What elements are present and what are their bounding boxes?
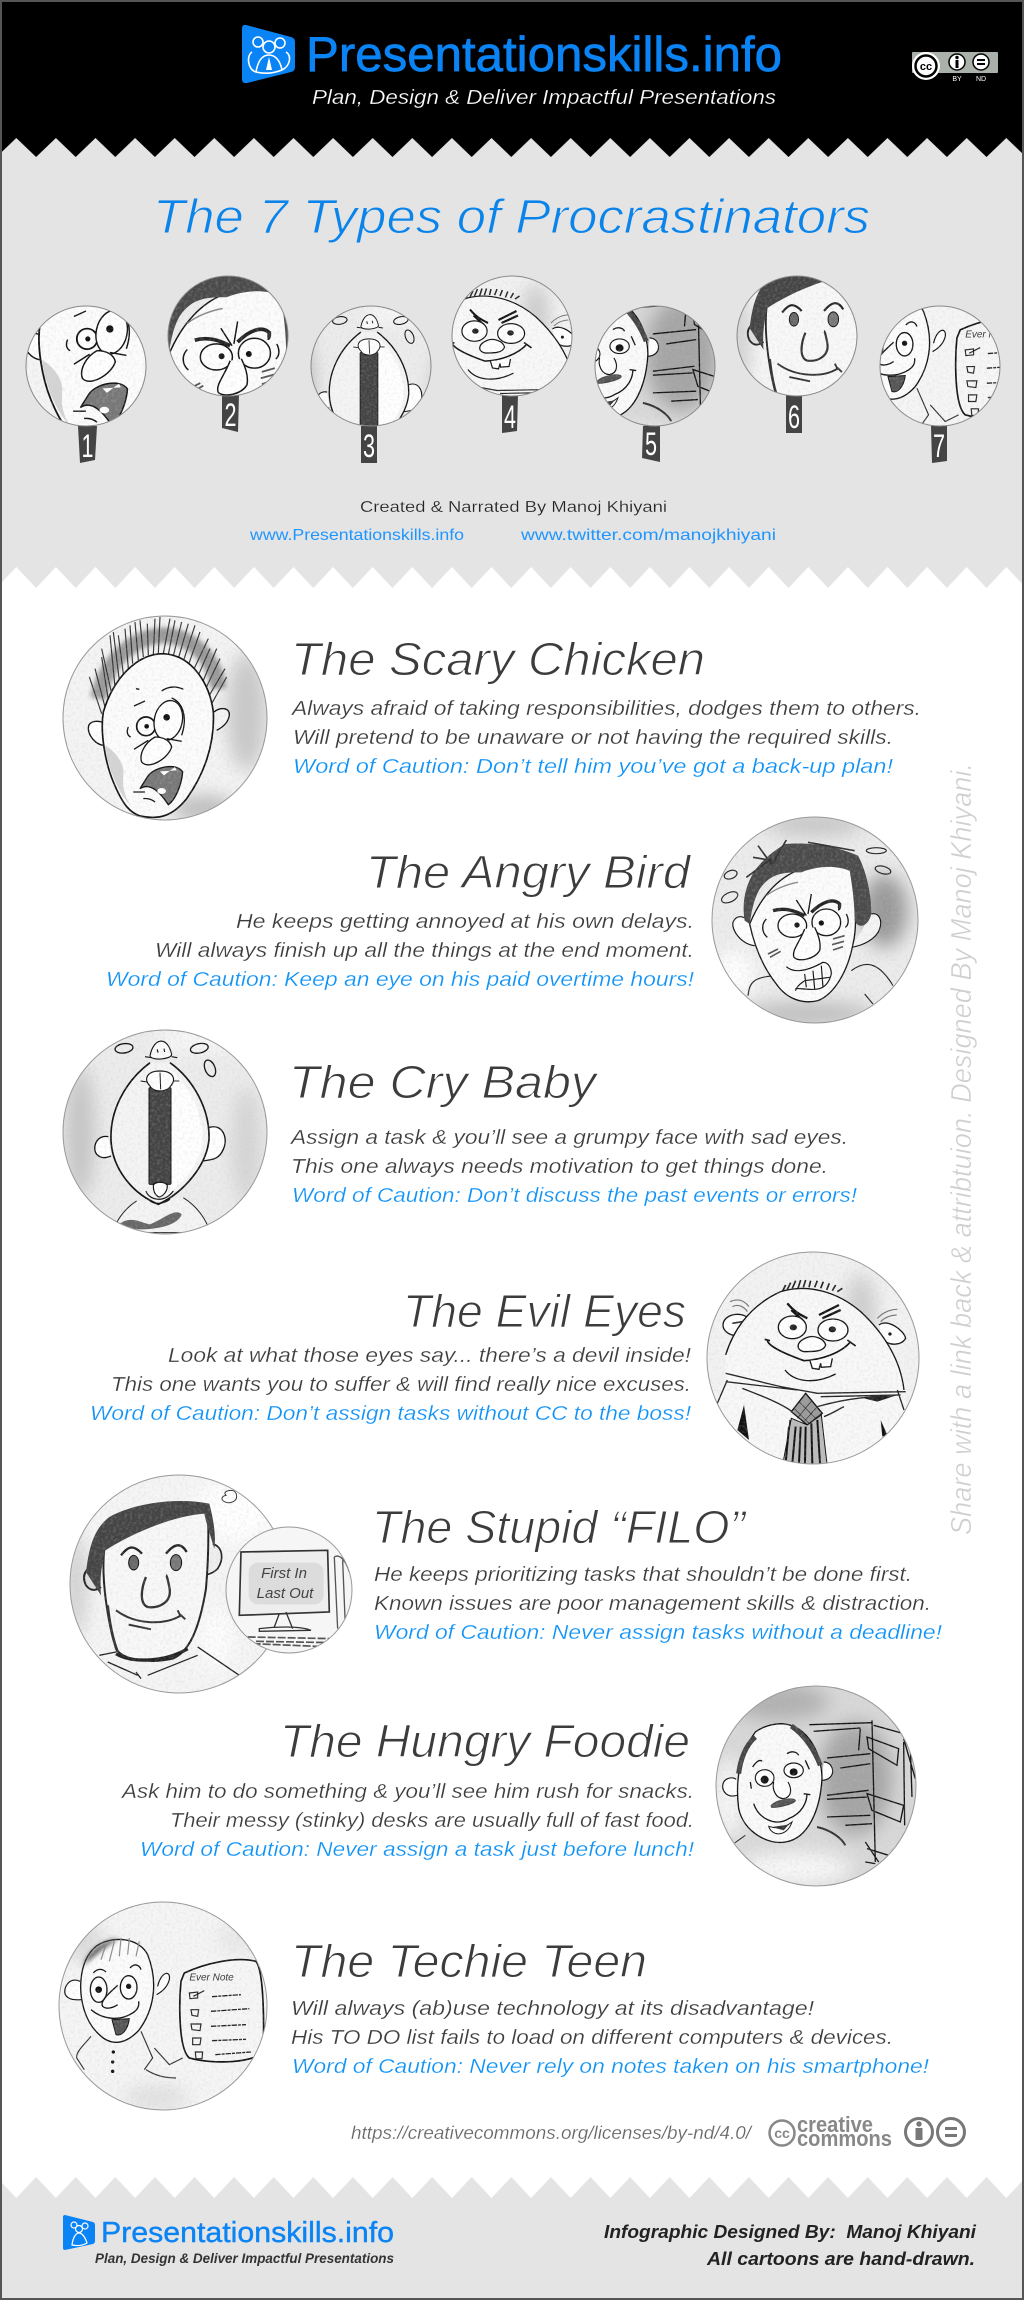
icon: evil eyes portrait bbox=[706, 1252, 920, 1464]
heading: The Angry Bird bbox=[366, 846, 691, 898]
icon: small portrait 2 with number tag bbox=[168, 276, 288, 432]
footer tagline: Plan, Design & Deliver Impactful Presentations bbox=[95, 2251, 394, 2266]
icon: cc by-nd badge: BY bbox=[952, 76, 962, 83]
description: Known issues are poor management skills & distraction. bbox=[374, 1593, 931, 1615]
title: The 7 Types of Procrastinators bbox=[153, 191, 870, 244]
icon: small portrait 1 with number tag bbox=[26, 306, 146, 463]
description: He keeps getting annoyed at his own delays. bbox=[236, 911, 694, 933]
description: He keeps prioritizing tasks that shouldn’t be done first. bbox=[374, 1564, 912, 1586]
word of caution: Word of Caution: Don’t discuss the past events or errors! bbox=[292, 1185, 857, 1207]
heading: The Hungry Foodie bbox=[280, 1715, 690, 1767]
credit line: Created & Narrated By Manoj Khiyani bbox=[360, 499, 667, 516]
description: Their messy (stinky) desks are usually full of fast food. bbox=[170, 1810, 694, 1832]
icon: angry bird portrait bbox=[712, 816, 918, 1024]
link: twitter: www.twitter.com/manojkhiyani bbox=[520, 527, 776, 544]
tagline: Plan, Design & Deliver Impactful Presentations bbox=[312, 87, 776, 109]
icon: monitor inset with first in last out: First In bbox=[261, 1565, 307, 1582]
icon: creative commons logo: cc bbox=[774, 2125, 790, 2141]
designer credit: Infographic Designed By: Manoj Khiyani bbox=[604, 2222, 977, 2242]
icon: footer logo badge bbox=[63, 2215, 95, 2250]
icon: filo portrait bbox=[70, 1474, 274, 1694]
description bbox=[291, 698, 921, 749]
icon: small portrait 2 with number tag: 2 bbox=[224, 397, 236, 433]
word of caution: Word of Caution: Keep an eye on his paid overtime hours! bbox=[106, 969, 695, 991]
panel: the techie teen bbox=[58, 1902, 929, 2110]
heading: The Stupid “FILO” bbox=[372, 1501, 748, 1553]
description bbox=[121, 1781, 694, 1832]
icon: small portrait 7 with number tag: 7 bbox=[933, 428, 945, 464]
panel: the scary chicken bbox=[62, 616, 918, 820]
icon: small portrait 1 with number tag: 1 bbox=[82, 428, 94, 464]
heading: The Cry Baby bbox=[289, 1056, 599, 1108]
description: Will always (ab)use technology at its disadvantage! bbox=[291, 1998, 815, 2020]
panel: the cry baby bbox=[62, 1030, 857, 1234]
description: His TO DO list fails to load on different computers & devices. bbox=[291, 2027, 893, 2049]
heading: The Techie Teen bbox=[291, 1935, 647, 1987]
icon: small portrait 4 with number tag: 4 bbox=[504, 399, 516, 435]
icon: small portrait 4 with number tag bbox=[452, 276, 572, 433]
icon: creative commons logo: commons bbox=[797, 2126, 892, 2151]
icon: logo people badge bbox=[242, 25, 295, 83]
description: Will always finish up all the things at the end moment. bbox=[155, 940, 694, 962]
description bbox=[111, 1345, 691, 1396]
icon: creative commons logo: creative bbox=[797, 2112, 873, 2137]
word of caution: Word of Caution: Never assign tasks without a deadline! bbox=[374, 1622, 942, 1644]
icon: small portrait 6 with number tag: 6 bbox=[788, 399, 800, 435]
icon: scary chicken portrait bbox=[62, 616, 268, 820]
description: Look at what those eyes say... there’s a devil inside! bbox=[168, 1345, 691, 1367]
icon: monitor inset with first in last out bbox=[226, 1527, 352, 1653]
icon: small portrait 5 with number tag: 5 bbox=[645, 426, 657, 462]
link: website: www.Presentationskills.info bbox=[249, 527, 464, 544]
description: This one always needs motivation to get things done. bbox=[291, 1156, 828, 1178]
icon: small portrait 3 with number tag bbox=[310, 306, 432, 463]
word of caution: Word of Caution: Never assign a task just before lunch! bbox=[140, 1839, 694, 1861]
description bbox=[374, 1564, 931, 1615]
hand-drawn note: All cartoons are hand-drawn. bbox=[706, 2249, 975, 2269]
icon: hungry foodie portrait bbox=[716, 1686, 916, 1886]
word of caution: Word of Caution: Don’t tell him you’ve got a back-up plan! bbox=[293, 756, 894, 778]
icon: cry baby portrait bbox=[62, 1030, 268, 1234]
vertical attribution text: Share with a link back & attribtuion. Designed By Manoj Khiyani. bbox=[946, 763, 978, 1535]
heading: The Scary Chicken bbox=[291, 633, 705, 685]
description: Always afraid of taking responsibilities, dodges them to others. bbox=[291, 698, 921, 720]
icon: monitor inset with first in last out: Last Out bbox=[257, 1585, 314, 1602]
icon: cc by-nd badge bbox=[912, 52, 998, 83]
description: Ask him to do something & you’ll see him rush for snacks. bbox=[121, 1781, 694, 1803]
description: Assign a task & you’ll see a grumpy face with sad eyes. bbox=[290, 1127, 848, 1149]
panel: footer bbox=[0, 2177, 1024, 2300]
icon: small portrait 7 with number tag bbox=[880, 306, 1000, 463]
icon: creative commons logo bbox=[770, 2112, 964, 2151]
description bbox=[290, 1127, 848, 1178]
panel: the angry bird bbox=[108, 816, 918, 1024]
description: This one wants you to suffer & will find really nice excuses. bbox=[111, 1374, 691, 1396]
icon: small portrait 3 with number tag: 3 bbox=[363, 428, 375, 464]
logo wordmark: Presentationskills.info bbox=[306, 28, 782, 82]
panel: the stupid filo bbox=[70, 1474, 942, 1694]
description bbox=[291, 1998, 893, 2049]
icon: cc by-nd badge: ND bbox=[976, 76, 986, 83]
panel: intro band bbox=[0, 140, 1024, 588]
heading: The Evil Eyes bbox=[403, 1285, 686, 1337]
word of caution: Word of Caution: Never rely on notes taken on his smartphone! bbox=[292, 2056, 929, 2078]
panel: the hungry foodie bbox=[121, 1686, 916, 1886]
icon: small portrait 6 with number tag bbox=[736, 276, 858, 433]
icon: small portrait 5 with number tag bbox=[594, 306, 716, 462]
icon: cc by-nd badge: cc bbox=[920, 61, 932, 73]
footer wordmark: Presentationskills.info bbox=[101, 2217, 394, 2249]
description bbox=[155, 911, 694, 962]
panel: header bbox=[0, 0, 1024, 157]
panel: the evil eyes bbox=[92, 1252, 920, 1464]
license url: https://creativecommons.org/licenses/by-nd/4.0/ bbox=[351, 2123, 753, 2143]
icon: techie teen portrait bbox=[58, 1902, 268, 2110]
description: Will pretend to be unaware or not having the required skills. bbox=[293, 727, 893, 749]
word of caution: Word of Caution: Don’t assign tasks without CC to the boss! bbox=[90, 1403, 691, 1425]
